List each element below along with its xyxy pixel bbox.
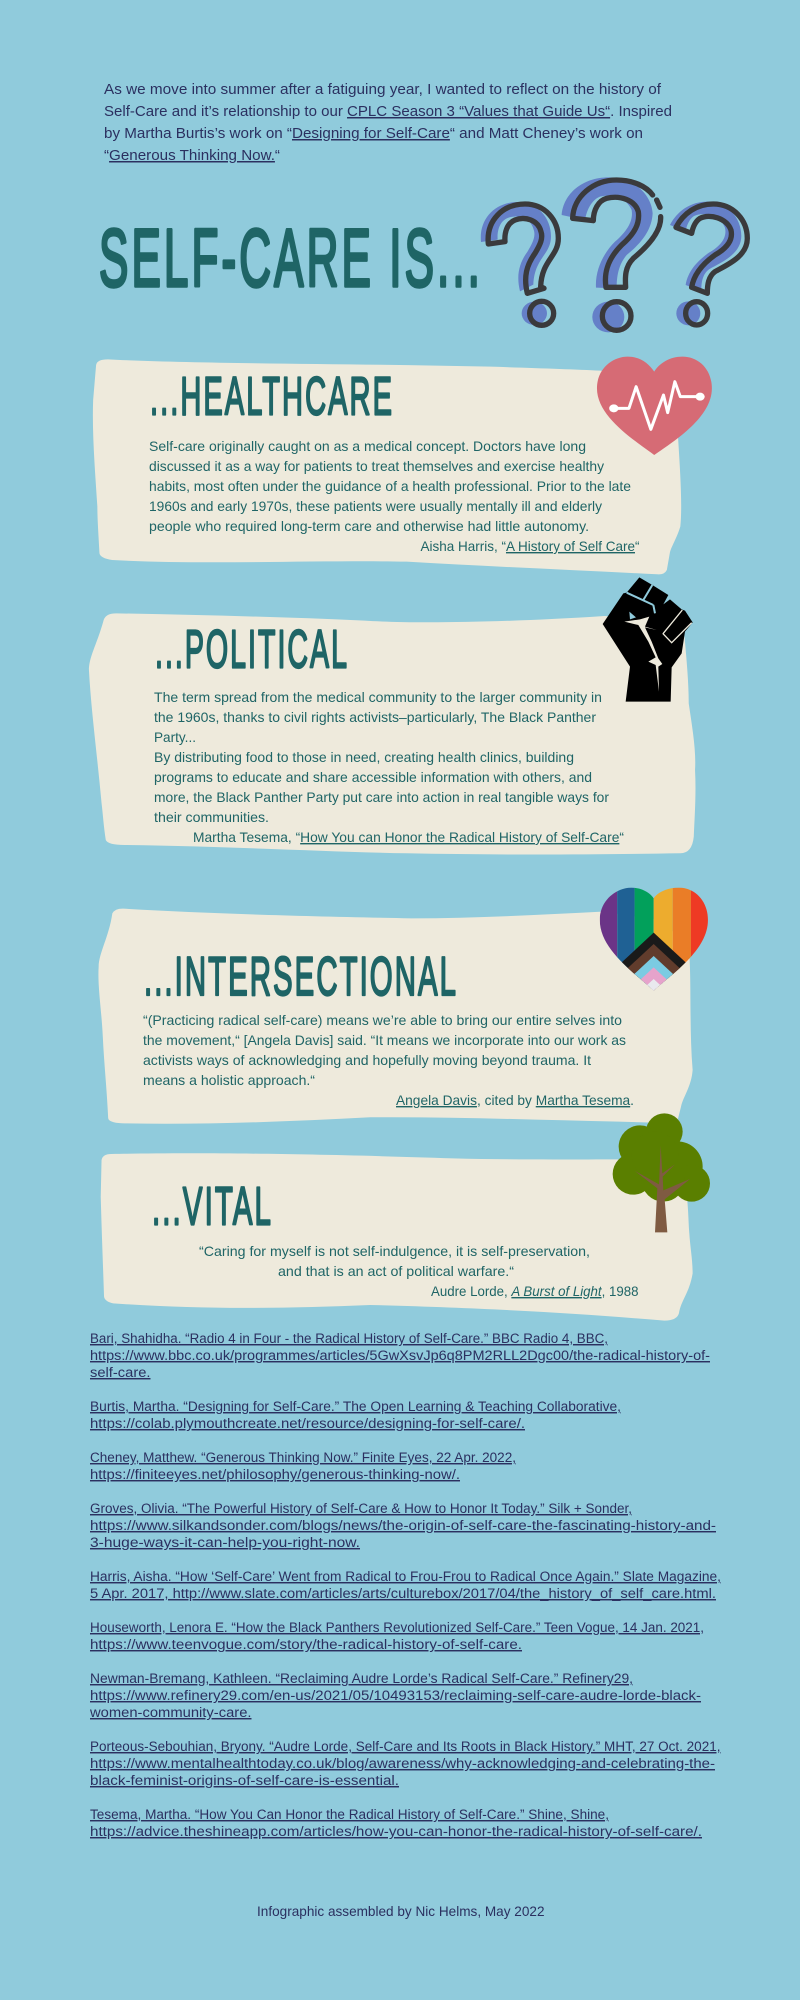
text: political quote: By distributing food to those in need, creating health clinics, building [154,749,574,765]
citation: Harris [90,1569,721,1601]
heading: healthcare: ...HEALTHCARE [150,366,394,426]
panel: intersectional [98,887,737,1124]
text: political quote: the 1960s, thanks to civil rights activists–particularly, The Black Panther [154,709,596,725]
panel background: intersectional [98,909,693,1124]
citation: Groves: Groves, Olivia. “The Powerful History of Self-Care & How to Honor It Today.” Silk + Sonder, [90,1501,632,1516]
intro text block: Self-Care and it’s relationship to our CPLC Season 3 “Values that Guide Us“. Inspired [104,103,672,120]
text: political quote: The term spread from the medical community to the larger community in [154,689,602,705]
citation: Cheney: https://finiteeyes.net/philosophy/generous-thinking-now/. [90,1467,460,1482]
icon: progress pride heart [600,888,708,991]
citation: Tesema: Tesema, Martha. “How You Can Honor the Radical History of Self-Care.” Shine, Shine, [90,1807,609,1822]
citation: Bari [90,1331,710,1380]
intro text block: by Martha Burtis’s work on “Designing for Self-Care“ and Matt Cheney’s work on [104,125,643,142]
text: vital quote: “Caring for myself is not self-indulgence, it is self-preservation, [199,1243,590,1259]
citation: Groves: https://www.silkandsonder.com/blogs/news/the-origin-of-self-care-the-fascinating-history-and- [90,1518,716,1533]
citation: Bari: https://www.bbc.co.uk/programmes/articles/5GwXsvJp6q8PM2RLL2Dgc00/the-radical-history-of- [90,1348,710,1363]
icon: heart with heartbeat [597,357,712,455]
text: intersectional quote: “(Practicing radical self-care) means we’re able to bring our entire selves into [143,1012,622,1028]
text: intersectional quote: Angela Davis, cited by Martha Tesema. [396,1092,634,1108]
panel: healthcare [93,357,712,574]
icon: raised fist [603,577,693,702]
panel: political [89,577,695,855]
citation: Burtis: https://colab.plymouthcreate.net/resource/designing-for-self-care/. [90,1416,525,1431]
text: vital quote: Audre Lorde, A Burst of Light, 1988 [431,1283,639,1299]
text: political quote: Party... [154,729,196,745]
citation: Newman-Bremang: Newman-Bremang, Kathleen. “Reclaiming Audre Lorde’s Radical Self-Care.” Refinery29, [90,1671,633,1686]
text: intersectional quote: the movement,“ [Angela Davis] said. “It means we incorporate into our work as [143,1032,626,1048]
citation: Porteous-Sebouhian: Porteous-Sebouhian, Bryony. “Audre Lorde, Self-Care and Its Roots in Black History.” MHT, 27 Oct. 2021, [90,1739,720,1754]
citation: Houseworth [90,1620,704,1652]
citation: Porteous-Sebouhian: https://www.mentalhealthtoday.co.uk/blog/awareness/why-acknowledging-and-celebrating-the- [90,1756,715,1771]
citation: Groves [90,1501,716,1550]
citation: Newman-Bremang [89,1671,701,1720]
text: healthcare quote [149,438,640,554]
citation: Porteous-Sebouhian: black-feminist-origins-of-self-care-is-essential. [90,1773,399,1788]
heading: intersectional: ...INTERSECTIONAL [144,945,458,1007]
text: healthcare quote: Self-care originally caught on as a medical concept. Doctors have long [149,438,586,454]
panel background: healthcare [93,359,681,574]
citation: Houseworth: https://www.teenvogue.com/story/the-radical-history-of-self-care. [90,1637,522,1652]
intro text block: As we move into summer after a fatiguing year, I wanted to reflect on the history of [104,81,662,98]
heading: vital: ...VITAL [152,1176,273,1236]
icon: tree [613,1113,710,1232]
text: political quote: more, the Black Panther Party put care into action in real tangible ways for [154,789,609,805]
citation: Groves: 3-huge-ways-it-can-help-you-right-now. [90,1535,360,1550]
citation: Porteous-Sebouhian [90,1739,720,1788]
panel background: political [89,613,695,855]
text: political quote: Martha Tesema, “How You can Honor the Radical History of Self-Care“ [193,829,624,845]
icon: left question mark [481,202,558,325]
citation: Tesema [90,1807,702,1839]
citation: Bari: Bari, Shahidha. “Radio 4 in Four - the Radical History of Self-Care.” BBC Radio 4, BBC, [90,1331,608,1346]
text: vital quote: and that is an act of political warfare.“ [278,1263,514,1279]
text: healthcare quote: habits, most often under the guidance of a health professional. Prior to the late [149,478,631,494]
text: healthcare quote: 1960s and early 1970s, these patients were usually mentally ill and elderly [149,498,602,514]
intro text block: “Generous Thinking Now.“ [104,147,280,164]
icon: three question marks [481,177,747,332]
intro text block [104,81,672,164]
text: healthcare quote: discussed it as a way for patients to treat themselves and exercise healthy [149,458,604,474]
heading: political: ...POLITICAL [155,620,349,680]
icon: right question mark [670,202,747,325]
citation: Cheney: Cheney, Matthew. “Generous Thinking Now.” Finite Eyes, 22 Apr. 2022, [90,1450,516,1465]
panel background: vital [101,1153,693,1321]
citation: Harris: Harris, Aisha. “How ‘Self-Care’ Went from Radical to Frou-Frou to Radical Once Again.” Slate Magazine, [90,1569,721,1584]
citation: Houseworth: Houseworth, Lenora E. “How the Black Panthers Revolutionized Self-Care.” Teen Vogue, 14 Jan. 2021, [90,1620,704,1635]
panel: vital [101,1113,710,1321]
text: intersectional quote: activists ways of acknowledging and hopefully moving beyond trauma. It [143,1052,591,1068]
citation: Harris: 5 Apr. 2017, http://www.slate.com/articles/arts/culturebox/2017/04/the_history_of_self_care.html. [90,1586,716,1601]
icon: centre question mark [562,177,661,332]
text: intersectional quote: means a holistic approach.“ [143,1072,315,1088]
text: political quote [154,689,624,845]
text: healthcare quote: people who required long-term care and otherwise had little autonomy. [149,518,589,534]
text: political quote: their communities. [154,809,269,825]
footer credit: Infographic assembled by Nic Helms, May 2022 [257,1903,545,1919]
citation: Burtis [90,1399,621,1431]
text: political quote: programs to educate and share accessible information with others, and [154,769,592,785]
citation: Bari: self-care. [90,1365,150,1380]
citation: Burtis: Burtis, Martha. “Designing for Self-Care.” The Open Learning & Teaching Collaborative, [90,1399,621,1414]
bibliography [89,1331,721,1839]
text: intersectional quote [143,1012,634,1108]
citation: Cheney [90,1450,516,1482]
title: SELF-CARE IS... [99,213,483,304]
text: healthcare quote: Aisha Harris, “A History of Self Care“ [420,538,640,554]
text: vital quote [199,1243,639,1299]
citation: Newman-Bremang: https://www.refinery29.com/en-us/2021/05/10493153/reclaiming-self-care-audre-lorde-black- [90,1688,701,1703]
citation: Newman-Bremang: women-community-care. [89,1705,252,1720]
citation: Tesema: https://advice.theshineapp.com/articles/how-you-can-honor-the-radical-history-of-self-care/. [90,1824,702,1839]
